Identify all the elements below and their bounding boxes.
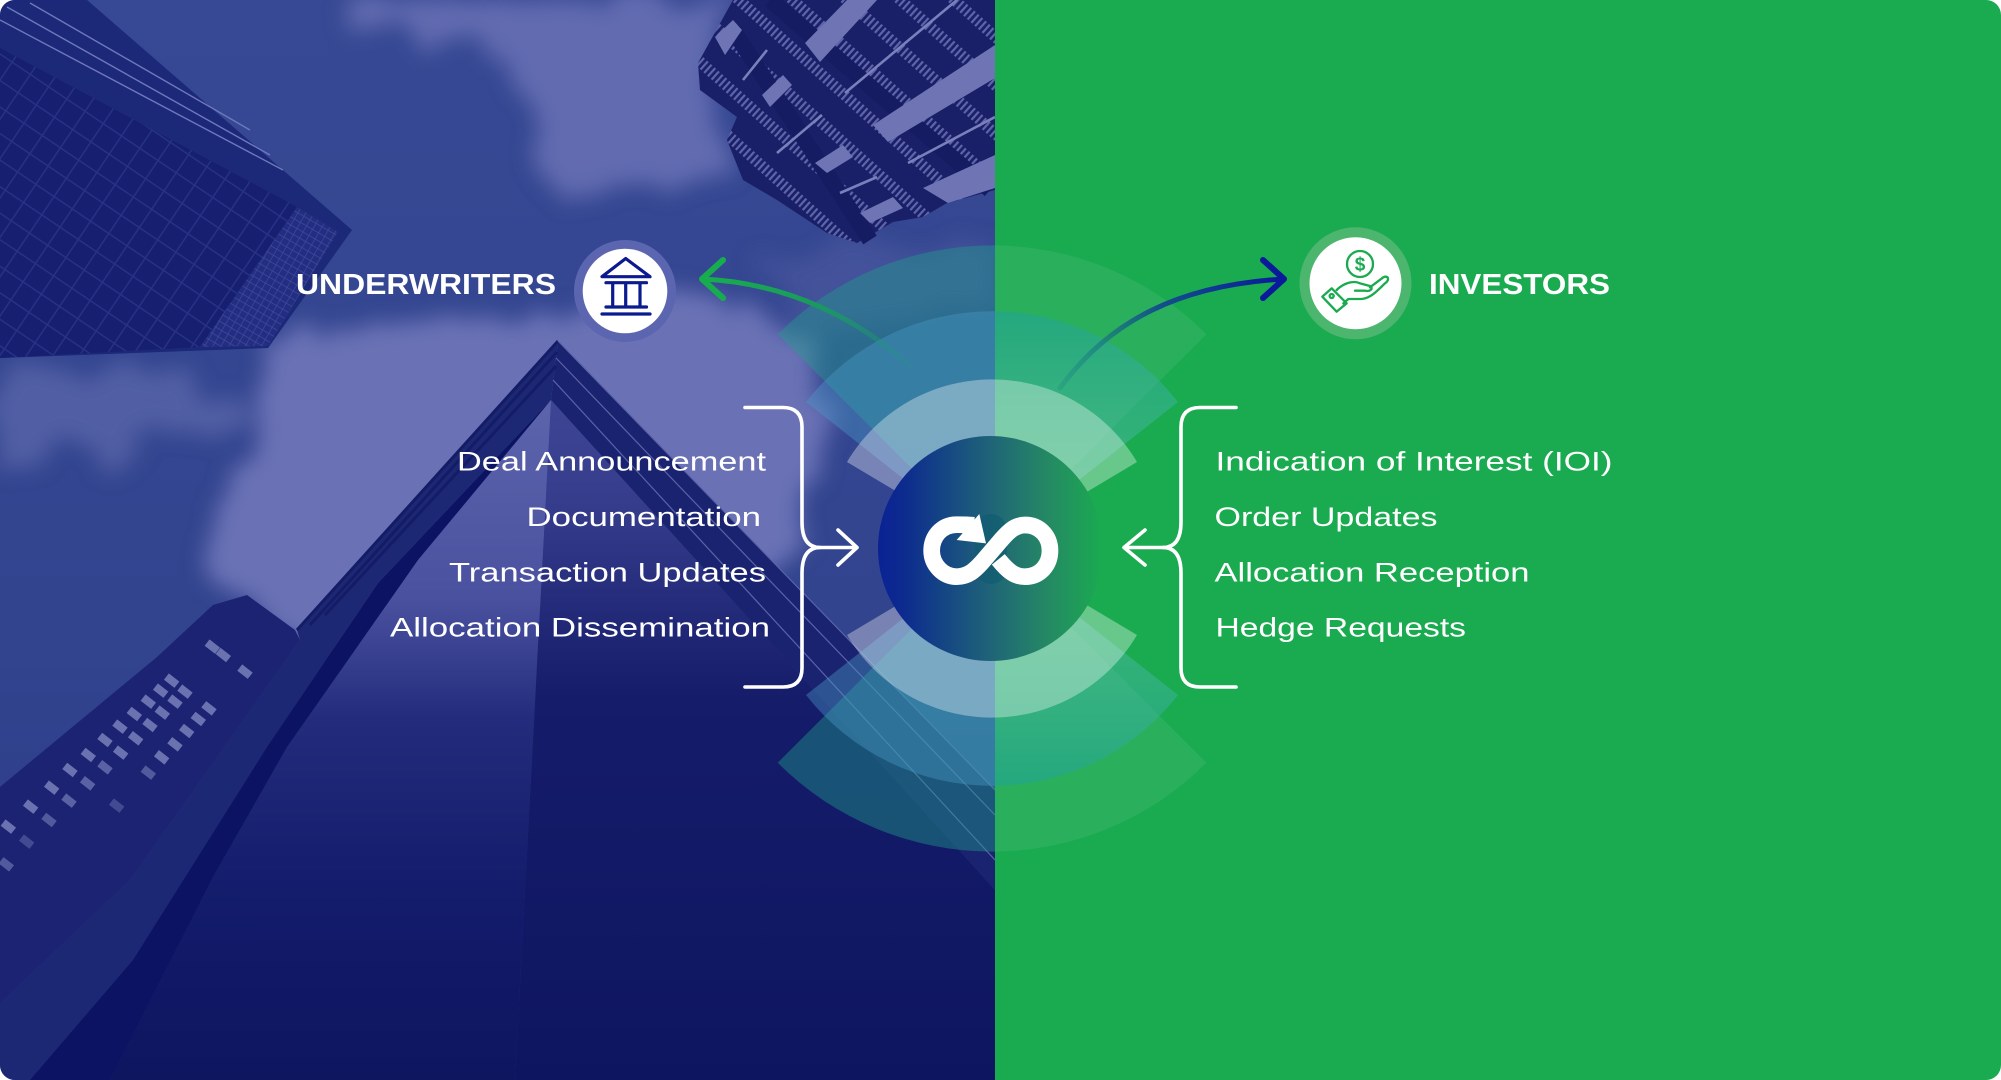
bracket: underwriter flows (745, 408, 857, 687)
arrow: to underwriters (702, 260, 912, 368)
bracket: investor flows (1124, 408, 1236, 687)
text block: investor items: Order Updates (1214, 502, 1438, 532)
heading: investors: INVESTORS (1429, 269, 1610, 301)
text block: underwriter items: Allocation Dissemination (390, 613, 770, 643)
heading: underwriters: UNDERWRITERS (296, 269, 556, 301)
infinity loop (932, 514, 1050, 577)
icon: hand holding coin (1300, 227, 1412, 339)
text block: investor items: Allocation Reception (1214, 558, 1530, 588)
arrow: to investors (1060, 260, 1284, 388)
text block: underwriter items: Transaction Updates (449, 558, 766, 588)
building: top left tower (0, 0, 352, 358)
text block: investor items (1214, 447, 1612, 643)
building: lower left block (0, 595, 300, 1003)
text block: underwriter items: Documentation (526, 502, 761, 532)
icon: hand holding coin: $ (1355, 254, 1366, 276)
clouds (0, 0, 990, 640)
text block: investor items: Hedge Requests (1216, 613, 1466, 643)
building: central glass tower (0, 341, 995, 1080)
text block: investor items: Indication of Interest (IOI) (1216, 447, 1612, 477)
icon: bank building (574, 240, 676, 342)
graphic: signal arcs right half (995, 246, 1206, 852)
building: top right block (698, 0, 995, 243)
icon: central hub disc with infinity logo (878, 436, 1103, 661)
panel: investors green background (995, 0, 2001, 1080)
text block: underwriter items: Deal Announcement (457, 447, 767, 477)
panel: underwriters skyline photo (0, 0, 995, 1080)
text block: underwriter items (390, 447, 770, 643)
graphic: signal arcs left half (778, 245, 995, 852)
